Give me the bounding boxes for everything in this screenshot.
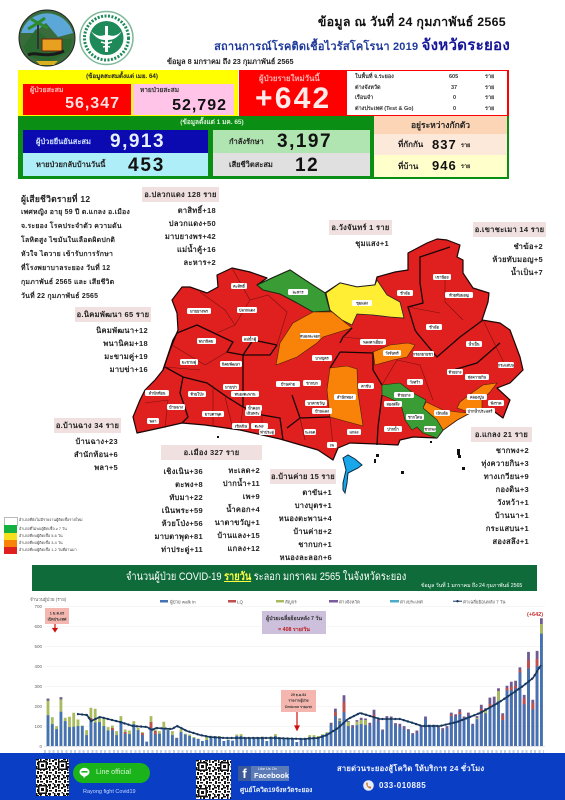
list: Mueang column 2: นาตาขวัญ+1 bbox=[215, 518, 260, 527]
sub-district name tags: ห้วยยาง bbox=[448, 368, 462, 374]
panel: since January 2022 bbox=[18, 116, 509, 179]
list: Pluak Daeng sub-districts: ตาสิทธิ์+18 bbox=[178, 206, 216, 215]
QR code: Line bbox=[36, 759, 69, 796]
label: Mueang: อ.เมือง 327 ราย bbox=[184, 448, 239, 457]
callout: seven-day average: = 408 ราย/วัน bbox=[278, 626, 310, 633]
district list: Wang Chan bbox=[329, 220, 392, 248]
heading: date: ข้อมูล ณ วันที่ 24 กุมภาพันธ์ 2565 bbox=[318, 15, 506, 29]
emblem: Rayong province seal bbox=[18, 10, 76, 66]
callout: 1 January reopening: 1 ม.ค.65 bbox=[50, 610, 64, 616]
sub-district name tags: ชากพง bbox=[424, 426, 436, 432]
y axis labels: 500 bbox=[34, 644, 42, 649]
y axis labels: 600 bbox=[34, 624, 42, 629]
zones: orange bbox=[276, 312, 497, 430]
list: Ban Chang sub-districts bbox=[74, 437, 118, 472]
sub-district name tags: หนองละลอก bbox=[300, 334, 321, 338]
QR code: Facebook bbox=[196, 760, 231, 799]
label: Ban Khai bbox=[270, 469, 336, 484]
y axis labels: 400 bbox=[34, 664, 42, 669]
list: Mueang column 2: ทะเลด+2 bbox=[228, 466, 260, 475]
stat: quarantine facility bbox=[374, 134, 507, 155]
label: Nikhom Phatthana: อ.นิคมพัฒนา 65 ราย bbox=[77, 310, 149, 319]
sub-district name tags: บ้านแลง bbox=[315, 408, 329, 414]
sub-district name tags: ตะสิทธิ์ bbox=[233, 282, 246, 288]
stat: confirmed cases: ผู้ป่วยยืนยันสะสม bbox=[36, 137, 91, 146]
stat: cumulative cases: ผู้ป่วยสะสม bbox=[30, 87, 64, 94]
stat: quarantine facility: ที่กักกัน bbox=[398, 140, 423, 149]
district list: Mueang bbox=[154, 445, 262, 554]
list: Pluak Daeng sub-districts: ละหาร+2 bbox=[184, 258, 216, 267]
district list: Pluak Daeng bbox=[142, 187, 219, 267]
stat: discharged today bbox=[23, 153, 208, 176]
sub-district name tags: พลงตาเอี่ยม bbox=[362, 338, 383, 344]
list: Nikhom Phatthana sub-districts bbox=[96, 326, 148, 374]
legend: map colours: อำเภอที่พบผู้ติดเชื้อ 1-2 วันที่ผ่านมา bbox=[19, 548, 77, 552]
hotline text: สายด่วนระยองสู้โควิด ให้บริการ 24 ชั่วโมง bbox=[337, 764, 484, 773]
sub-district name tags: ละหาร bbox=[292, 290, 304, 294]
list: Klaeng sub-districts: ชากพง+2 bbox=[496, 446, 529, 455]
list: Klaeng sub-districts: วังหว้า+1 bbox=[497, 498, 529, 507]
badge: Like us on Facebook: f bbox=[242, 766, 247, 781]
label: Klaeng: อ.แกลง 21 ราย bbox=[475, 430, 528, 439]
table: new case breakdown: ในพื้นที่ จ.ระยอง bbox=[355, 74, 394, 80]
stat: in treatment: 3,197 bbox=[277, 131, 332, 152]
list: Mueang column 2: เพ+9 bbox=[243, 492, 260, 501]
sub-district name tags: น้ำเป็น bbox=[468, 340, 480, 346]
list: Pluak Daeng sub-districts: มาบยางพร+42 bbox=[165, 232, 216, 241]
stat: cumulative cases: 56,347 bbox=[65, 95, 120, 112]
footer bbox=[0, 753, 565, 800]
sub-district name tags: ตะพง bbox=[255, 424, 264, 428]
text block: death report: ที่โรงพยาบาลระยอง วันที่ 12 bbox=[21, 265, 110, 272]
list: Nikhom Phatthana sub-districts: นิคมพัฒนา+12 bbox=[96, 326, 148, 335]
sub-district name tags: ชุมแสง bbox=[356, 300, 368, 306]
sub-district name tags: มาบข่า bbox=[225, 384, 237, 390]
chart legend bbox=[160, 598, 505, 606]
y axis labels: 200 bbox=[34, 704, 42, 709]
list: Pluak Daeng sub-districts bbox=[165, 204, 216, 267]
heading: quarantine bbox=[374, 116, 507, 134]
chart legend: ผู้ป่วย walk in bbox=[170, 600, 196, 606]
label: Khao Chamao: อ.เขาชะเมา 14 ราย bbox=[475, 225, 544, 234]
y axis labels: 300 bbox=[34, 684, 42, 689]
list: Ban Khai sub-districts: บางบุตร+1 bbox=[295, 501, 332, 510]
label: Ban Chang bbox=[54, 418, 121, 433]
list: Khao Chamao sub-districts: ชำฆ้อ+2 bbox=[514, 242, 543, 251]
label: Khao Chamao bbox=[473, 222, 546, 237]
sub-district name tags: ทุ่งควายกิน bbox=[468, 374, 487, 380]
caption: Rayong fight Covid19: Rayong fight Covid19 bbox=[83, 789, 136, 795]
list: Ban Khai sub-districts: หนองตะพาน+4 bbox=[279, 514, 332, 523]
sub-district name tags: วังหว้า bbox=[410, 378, 420, 384]
chart legend: ค่าเฉลี่ยย้อนหลัง 7 วัน bbox=[463, 598, 505, 604]
list: Mueang column 2 bbox=[214, 466, 260, 553]
sub-district name tags: กะเฉด bbox=[305, 430, 316, 434]
button: Line official: Line official bbox=[96, 769, 131, 776]
y axis labels: 700 bbox=[34, 604, 42, 609]
sub-district name tags: แกลง bbox=[350, 430, 359, 434]
text block: death report: กุมภาพันธ์ 2565 และ เสียชีวิต bbox=[21, 279, 114, 286]
callout: first Omicron case: รายงานผู้ป่วย bbox=[288, 698, 309, 704]
table: new case breakdown: 0 bbox=[453, 95, 456, 101]
sub-district name tags bbox=[145, 274, 514, 448]
label: Ban Khai: อ.บ้านค่าย 15 ราย bbox=[271, 472, 335, 481]
sub-district name tags: ห้วยยาง bbox=[397, 392, 411, 398]
list: Mueang column 1: เนินพระ+59 bbox=[162, 506, 203, 515]
stat: home quarantine: ราย bbox=[461, 164, 470, 170]
list: Mueang column 1: มาบตาพุด+81 bbox=[154, 532, 203, 541]
label: Wang Chan bbox=[329, 220, 392, 235]
list: Pluak Daeng sub-districts: ปลวกแดง+50 bbox=[169, 219, 216, 228]
text block: death report: จ.ระยอง โรคประจำตัว ความดัน bbox=[21, 223, 122, 230]
sub-district name tags: นาตาขวัญ bbox=[307, 400, 325, 406]
chart subtitle: ข้อมูล วันที่ 1 มกราคม ถึง 24 กุมภาพันธ์ 2565 bbox=[421, 583, 522, 589]
sub-district name tags: ห้วยโป่ง bbox=[190, 390, 204, 396]
list: Ban Chang sub-districts: บ้านฉาง+23 bbox=[75, 437, 118, 446]
sub-district name tags: เพ bbox=[330, 442, 334, 448]
table: new case breakdown: ราย bbox=[485, 85, 494, 91]
stat: deaths bbox=[213, 153, 370, 176]
sub-district name tags: ปากน้ำประแสร์ bbox=[468, 408, 493, 414]
table: new case breakdown: ต่างประเทศ (Test & Go) bbox=[355, 106, 414, 112]
list: Ban Khai sub-districts: บ้านค่าย+2 bbox=[293, 527, 332, 536]
zone: yellow bbox=[326, 280, 404, 325]
button: Line official bbox=[73, 763, 150, 783]
sub-district name tags: ตาขัน bbox=[361, 384, 371, 388]
caption: Covid centre: ศูนย์โควิด19จังหวัดระยอง bbox=[240, 787, 312, 794]
subtitle: data period: ข้อมูล 8 มกราคม ถึง 23 กุมภาพันธ์ 2565 bbox=[167, 57, 294, 66]
district list: Ban Khai bbox=[270, 469, 336, 562]
y axis labels: 0 bbox=[39, 744, 42, 749]
sub-district name tags: สองสลึง bbox=[387, 402, 400, 406]
table: new case breakdown: ราย bbox=[485, 95, 494, 101]
phone number: 033-010885 bbox=[379, 781, 426, 790]
stat: cumulative cases bbox=[23, 84, 131, 115]
zones: green bbox=[257, 270, 330, 312]
list: Klaeng sub-districts: ทางเกวียน+9 bbox=[484, 472, 529, 481]
legend: map colours: อำเภอที่ยังไม่มีรายงานผู้ติดเชื้อรายใหม่ bbox=[19, 518, 83, 522]
heading: quarantine: อยู่ระหว่างกักตัว bbox=[411, 120, 470, 130]
table: new case breakdown: 605 bbox=[449, 74, 458, 80]
stat: cumulative recovered bbox=[133, 84, 234, 115]
text block: death report: ผู้เสียชีวิตรายที่ 12 bbox=[21, 194, 90, 204]
stat: in treatment bbox=[213, 130, 370, 153]
list: Klaeng sub-districts: สองสลึง+1 bbox=[492, 537, 529, 546]
list: Mueang column 2: ปากน้ำ+11 bbox=[223, 479, 260, 488]
badge: Like us on Facebook bbox=[238, 766, 289, 781]
list: Mueang column 2: บ้านแลง+15 bbox=[217, 531, 260, 540]
stat: confirmed cases: 9,913 bbox=[110, 131, 165, 152]
sub-district name tags: พนานิคม bbox=[198, 338, 214, 344]
label: Wang Chan: อ.วังจันทร์ 1 ราย bbox=[331, 223, 390, 232]
table: new case breakdown: ราย bbox=[485, 74, 494, 80]
text block: death report: วันที่ 22 กุมภาพันธ์ 2565 bbox=[21, 293, 98, 300]
list: Klaeng sub-districts: กองดิน+3 bbox=[496, 485, 529, 494]
chart legend: สัญจร bbox=[285, 600, 297, 604]
table: new case breakdown bbox=[347, 71, 507, 115]
text block: death report bbox=[20, 193, 130, 300]
list: Mueang column 1: ท่าประดู่+11 bbox=[161, 545, 203, 554]
callout: first Omicron case: Omicron รายแรก bbox=[285, 705, 312, 709]
list: Wang Chan sub-districts: ชุมแสง+1 bbox=[355, 239, 389, 248]
sub-district name tags: มาบยางพร bbox=[190, 308, 209, 314]
sub-district name tags: คลองปูน bbox=[470, 394, 484, 400]
list: Klaeng sub-districts: บ้านนา+1 bbox=[495, 511, 529, 520]
list: Nikhom Phatthana sub-districts: มาบข่า+16 bbox=[110, 365, 148, 374]
small islands bbox=[217, 436, 465, 474]
icon: Line bbox=[80, 768, 90, 778]
list: Mueang column 1: ห้วยโป่ง+56 bbox=[162, 519, 203, 528]
text block: death report: หัวใจ ไตวาย เข้ารับการรักษา bbox=[21, 251, 113, 258]
sub-district name tags: หนองตะพาน bbox=[235, 392, 256, 396]
callout: first Omicron case bbox=[281, 690, 316, 730]
list: Nikhom Phatthana sub-districts: พนานิคม+18 bbox=[103, 339, 148, 348]
sub-district name tags: บ้านค่าย bbox=[281, 380, 295, 386]
y axis labels: 100 bbox=[34, 724, 42, 729]
sub-district name tags: กระแสบน bbox=[498, 362, 514, 368]
district boundaries bbox=[163, 247, 500, 445]
sub-district name tags: ชากบก bbox=[306, 380, 319, 386]
sub-district name tags: สำนักทอง bbox=[337, 394, 353, 400]
label: Nikhom Phatthana bbox=[75, 307, 151, 322]
list: Klaeng sub-districts: กระแสบน+1 bbox=[486, 524, 529, 533]
caption: new cases: ผู้ป่วยรายใหม่วันนี้ bbox=[259, 74, 320, 83]
stat: deaths: เสียชีวิตสะสม bbox=[229, 160, 273, 169]
island: Koh Samet bbox=[343, 455, 362, 493]
list: Ban Chang sub-districts: สำนักท้อน+6 bbox=[74, 450, 118, 459]
legend: map colours bbox=[4, 517, 83, 554]
province outline bbox=[133, 239, 523, 460]
sub-district name tags: ชำฆ้อ bbox=[429, 324, 440, 330]
table: new case breakdown: ราย bbox=[485, 106, 494, 112]
list: Khao Chamao sub-districts: ห้วยทับมอญ+5 bbox=[492, 255, 543, 264]
icon: phone bbox=[363, 780, 374, 791]
table: new case breakdown: เรือนจำ bbox=[355, 95, 373, 101]
district list: Khao Chamao bbox=[473, 222, 546, 277]
callout: 1 January reopening bbox=[45, 608, 69, 632]
panel: cumulative since April 2021 bbox=[18, 70, 238, 116]
district list: Klaeng bbox=[471, 427, 532, 546]
sub-district name tags: เนินพระ bbox=[246, 410, 260, 416]
y axis title: จำนวนผู้ป่วย (ราย) bbox=[30, 596, 67, 603]
legend: map colours: อำเภอที่พบผู้ติดเชื้อ 5-6 วัน bbox=[19, 534, 63, 538]
stat: home quarantine: 946 bbox=[432, 158, 457, 173]
list: Ban Khai sub-districts bbox=[279, 488, 332, 562]
text block: death report: โลหิตสูง ไขมันในเลือดผิดปกติ bbox=[21, 237, 115, 244]
district list: Nikhom Phatthana bbox=[75, 307, 151, 374]
list: Mueang column 1: ตะพง+8 bbox=[175, 480, 203, 489]
list: Mueang column 2: น้ำคอก+4 bbox=[226, 505, 260, 514]
callout: seven-day average bbox=[262, 611, 326, 634]
stat: +642: +642 bbox=[255, 82, 331, 115]
sub-district name tags: พังราด bbox=[490, 400, 502, 406]
sub-district name tags: มะขามคู่ bbox=[182, 360, 197, 366]
label: Klaeng bbox=[471, 427, 532, 442]
table: new case breakdown: 0 bbox=[453, 106, 456, 112]
stat: cumulative recovered: หายป่วยสะสม bbox=[140, 87, 179, 94]
list: Klaeng sub-districts bbox=[481, 446, 529, 546]
table: new case breakdown: 37 bbox=[451, 85, 457, 91]
stat: discharged today: หายป่วยกลับบ้านวันนี้ bbox=[36, 160, 105, 169]
table: new case breakdown: ต่างจังหวัด bbox=[355, 85, 381, 91]
chart legend: ต่างจังหวัด bbox=[339, 600, 360, 604]
list: Mueang column 1 bbox=[154, 467, 203, 554]
emblem: Ministry of Public Health seal bbox=[79, 10, 134, 66]
sub-district name tags: แม่น้ำคู้ bbox=[244, 336, 257, 342]
sub-district name tags: นิคมพัฒนา bbox=[221, 362, 240, 366]
x axis tick strip bbox=[44, 750, 544, 753]
y axis labels bbox=[34, 604, 42, 749]
badge: Like us on Facebook: Like Us On bbox=[258, 767, 277, 771]
label: Pluak Daeng: อ.ปลวกแดง 128 ราย bbox=[144, 190, 217, 199]
chart header banner bbox=[32, 565, 537, 591]
caption: period: (ข้อมูลตั้งแต่ 1 มค. 65) bbox=[180, 119, 244, 126]
list: Mueang column 1: เชิงเนิน+36 bbox=[163, 467, 203, 476]
stat: confirmed cases bbox=[23, 130, 208, 153]
badge: Like us on Facebook: Facebook bbox=[254, 771, 289, 780]
list: Nikhom Phatthana sub-districts: มะขามคู่+19 bbox=[104, 352, 148, 361]
sub-district name tags: ปลวกแดง bbox=[239, 306, 255, 312]
list: Pluak Daeng sub-districts: แม่น้ำคู้+16 bbox=[177, 245, 216, 254]
text block: death report: เพศหญิง อายุ 59 ปี ต.แกลง อ.เมือง bbox=[21, 209, 130, 216]
stat: in treatment: กำลังรักษา bbox=[229, 137, 264, 146]
stat: quarantine facility: 837 bbox=[432, 137, 457, 152]
line: seven-day average bbox=[77, 665, 541, 739]
callout: first Omicron case: 29 ธ.ค.64 bbox=[291, 693, 306, 697]
list: Mueang column 2: แกลง+12 bbox=[228, 544, 260, 553]
sub-district name tags: บ้านฉาง bbox=[169, 404, 183, 410]
zones: green south bbox=[382, 383, 443, 438]
stat: home quarantine: ที่บ้าน bbox=[398, 162, 418, 171]
list: Ban Chang sub-districts: พลา+5 bbox=[94, 463, 118, 472]
map: Rayong province by district bbox=[132, 238, 524, 494]
caption: cumulative period: (ข้อมูลสะสมตั้งแต่ เมย. 64) bbox=[86, 73, 158, 80]
gridlines bbox=[44, 606, 545, 726]
chart: daily COVID-19 cases bbox=[30, 596, 545, 749]
list: Ban Khai sub-districts: ชากบก+1 bbox=[298, 540, 332, 549]
sub-district name tags: ท่าประดู่ bbox=[260, 428, 274, 436]
stat: discharged today: 453 bbox=[128, 155, 165, 176]
label: Mueang bbox=[161, 445, 262, 460]
sub-district name tags: บางบุตร bbox=[315, 356, 330, 362]
bars: walk-in cases bbox=[48, 634, 541, 746]
stat: cumulative recovered: 52,792 bbox=[172, 97, 227, 114]
bars: other local and travel cases bbox=[48, 697, 327, 746]
panel: quarantine bbox=[374, 116, 507, 177]
panel: new cases today bbox=[239, 70, 509, 116]
stat: deaths: 12 bbox=[295, 155, 319, 176]
title: สถานการณ์โรคติดเชื้อไวรัสโคโรนา 2019 จังหวัดระยอง bbox=[214, 37, 510, 54]
sub-district name tags: กรอกยายชา bbox=[413, 352, 433, 356]
sub-district name tags: ชำฆ้อ bbox=[400, 290, 411, 296]
callout: 1 January reopening: เปิดประเทศ bbox=[48, 616, 67, 622]
stat: home quarantine bbox=[374, 155, 507, 177]
sub-district name tags: เนินฆ้อ bbox=[436, 410, 449, 416]
sub-district name tags: ปากน้ำ bbox=[387, 426, 399, 432]
legend: map colours: อำเภอที่พบผู้ติดเชื้อ 3-4 วัน bbox=[19, 541, 63, 545]
list: Ban Khai sub-districts: ตาขัน+1 bbox=[302, 488, 332, 497]
list: Ban Khai sub-districts: หนองละลอก+6 bbox=[280, 553, 332, 562]
chart legend: ต่างประเทศ bbox=[400, 600, 423, 604]
list: Khao Chamao sub-districts: น้ำเป็น+7 bbox=[511, 268, 543, 277]
sub-district name tags: วังจันทร์ bbox=[385, 350, 400, 356]
sub-district name tags: สำนักท้อน bbox=[149, 390, 166, 396]
sub-district name tags: น้ำคอก bbox=[248, 404, 261, 410]
sub-district name tags: เขาน้อย bbox=[435, 274, 449, 280]
label: Ban Chang: อ.บ้านฉาง 34 ราย bbox=[56, 421, 119, 430]
list: Khao Chamao sub-districts bbox=[492, 242, 543, 277]
stat: quarantine facility: ราย bbox=[461, 143, 470, 149]
list: Mueang column 1: ทับมา+22 bbox=[169, 493, 203, 502]
district list: Ban Chang bbox=[54, 418, 121, 472]
chart legend: LQ bbox=[237, 600, 244, 604]
legend: map colours: อำเภอที่ไม่พบผู้ติดเชื้อ ≥ 7 วัน bbox=[19, 527, 67, 531]
sub-district name tags: ชากโดน bbox=[408, 414, 422, 420]
sub-district name tags: ห้วยทับมอญ bbox=[449, 292, 470, 298]
sub-district name tags: เชิงเนิน bbox=[235, 424, 248, 428]
label: latest value: (+642) bbox=[527, 612, 543, 618]
sub-district name tags: มาบตาพุด bbox=[205, 412, 222, 418]
label: Pluak Daeng bbox=[142, 187, 219, 202]
list: Klaeng sub-districts: ทุ่งควายกิน+3 bbox=[481, 459, 529, 468]
chart title: จำนวนผู้ป่วย COVID-19 รายวัน ระลอก มกราคม 2565 ในจังหวัดระยอง bbox=[126, 571, 406, 583]
sub-district name tags: พลา bbox=[149, 418, 156, 424]
callout: seven-day average: ผู้ป่วยเฉลี่ยย้อนหลัง 7 วัน bbox=[266, 614, 322, 623]
